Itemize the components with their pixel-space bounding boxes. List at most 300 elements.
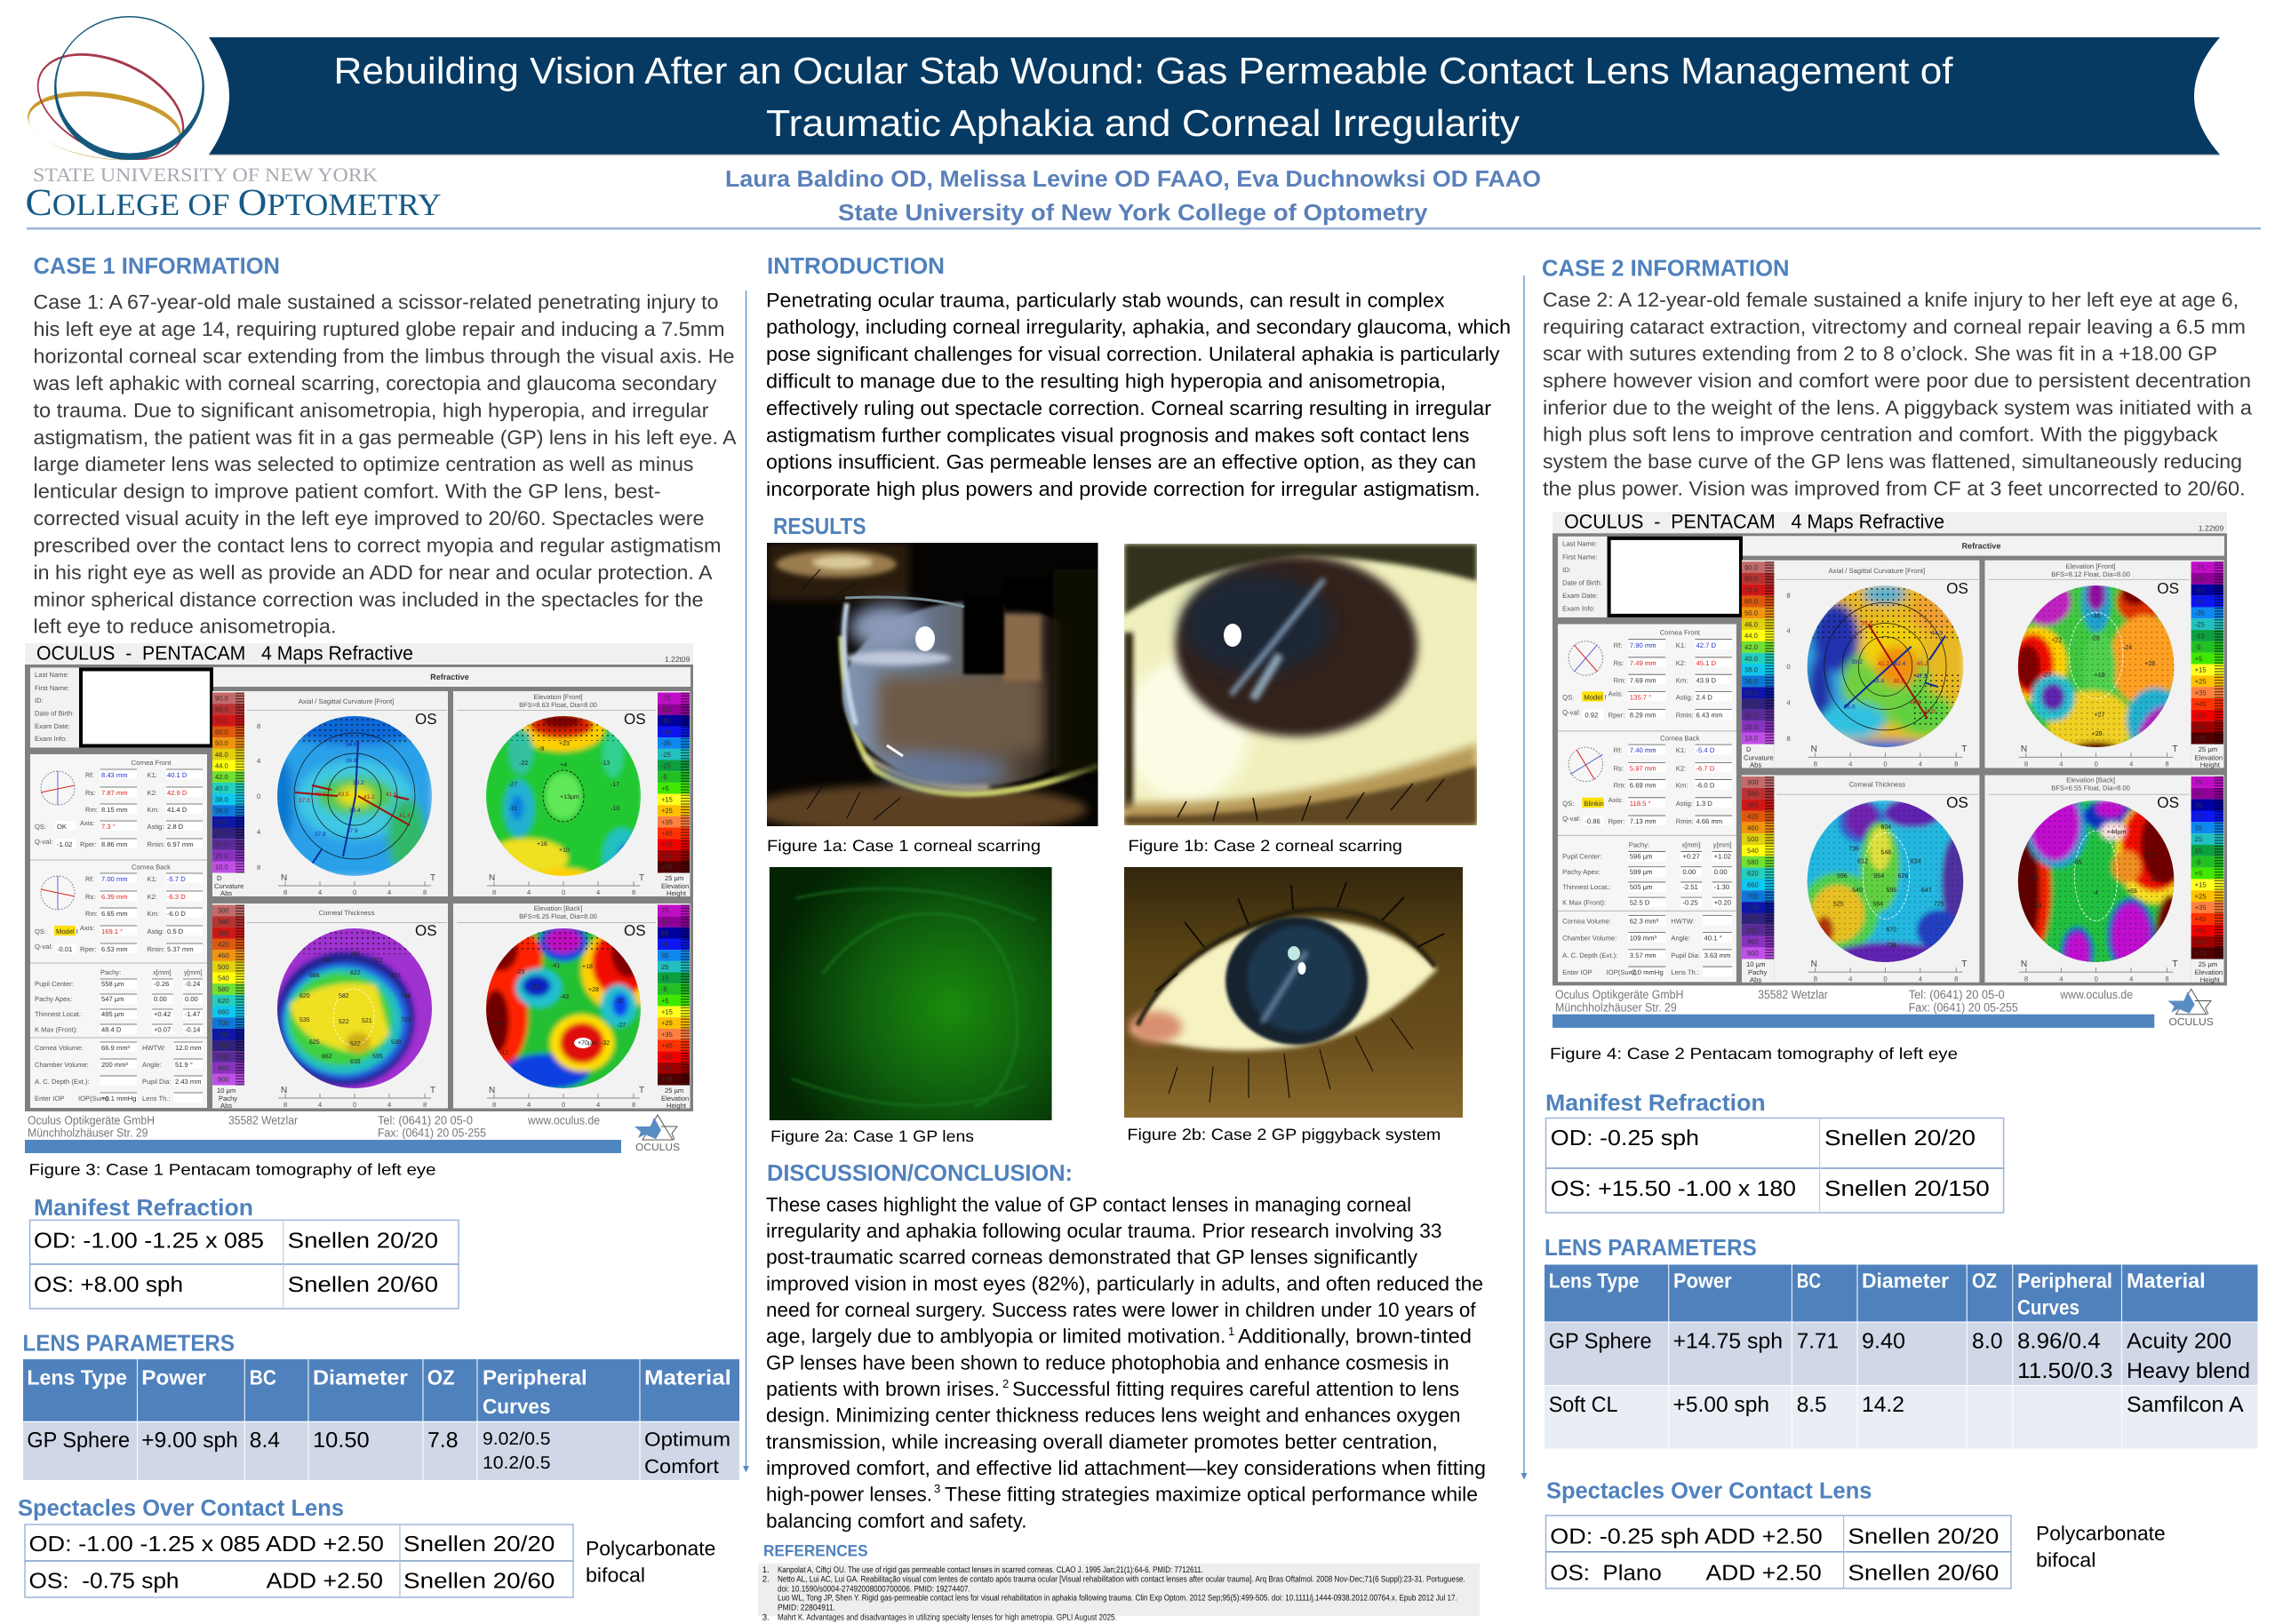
- chart: case 1 Pentacam 4 maps refractive: Rs:: [85, 893, 95, 901]
- chart: case 1 Pentacam 4 maps refractive: Km:: [148, 806, 159, 814]
- caption: figure 2b: Figure 2b: Case 2 GP piggyback system: [1127, 1126, 1441, 1143]
- map: elevation front: -24: [2123, 645, 2132, 651]
- text block: case 2 narrative: requiring cataract extraction, vitrectomy and corneal repair leaving a 6.5 mm: [1543, 315, 2246, 338]
- map: elevation back: -52: [531, 984, 540, 991]
- chart: case 1 Pentacam 4 maps refractive: N: [281, 873, 287, 883]
- table: manifest refraction: OD: -0.25 sph: [1551, 1126, 1699, 1150]
- text block: reference list: Kanpolat A, Ciftçi OU. The use of rigid gas permeable contact lenses in scarred corneas. CLAO J. 1995 Jan;21(1):64-6. PMID: 7712611.: [778, 1565, 1203, 1575]
- chart: case 1 Pentacam 4 maps refractive: 420: [218, 940, 229, 949]
- chart: case 2 Pentacam 4 maps refractive: 60.0: [1744, 598, 1758, 606]
- chart: case 1 Pentacam 4 maps refractive: -6.0 D: [167, 910, 186, 918]
- chart: case 2 Pentacam 4 maps refractive: Elevation: [2195, 968, 2223, 976]
- text block: case 1 narrative: astigmatism, the patient was fit in a gas permeable (GP) lens in his left eye. A: [34, 426, 736, 449]
- chart: case 1 Pentacam 4 maps refractive: Cornea Back: [132, 864, 171, 871]
- chart: case 2 Pentacam 4 maps refractive: +65: [2195, 938, 2207, 946]
- chart: case 2 Pentacam 4 maps refractive: 6.43 mm: [1696, 712, 1722, 720]
- chart: case 1 Pentacam 4 maps refractive: T: [430, 1086, 435, 1095]
- chart: case 2 Pentacam 4 maps refractive: 90.0: [1744, 563, 1758, 571]
- map: corneal thickness: 725: [1934, 901, 1944, 907]
- chart: case 2 Pentacam 4 maps refractive: T: [1961, 744, 1967, 754]
- chart: case 1 Pentacam 4 maps refractive: Tel: (0641) 20 05-0: [378, 1114, 473, 1126]
- text block: case 2 narrative: Case 2: A 12-year-old female sustained a knife injury to her left eye at age 6,: [1543, 289, 2239, 311]
- text block: discussion: irregularity and aphakia following ocular trauma. Prior research involving 33: [766, 1220, 1442, 1242]
- chart: case 1 Pentacam 4 maps refractive: 51.9 °: [175, 1061, 193, 1069]
- chart: case 2 Pentacam 4 maps refractive: 42.7 D: [1696, 641, 1717, 649]
- text block: discussion: 3: [934, 1482, 940, 1495]
- chart: case 1 Pentacam 4 maps refractive: -1.47: [185, 1010, 200, 1018]
- map: corneal thickness: 723: [401, 1017, 411, 1023]
- table: manifest refraction: Snellen 20/150: [1824, 1177, 1990, 1201]
- chart: case 1 Pentacam 4 maps refractive: T: [639, 1086, 644, 1095]
- text block: reference list: PMID: 22804911.: [778, 1604, 835, 1613]
- heading: spectacles over contact lens: Spectacles Over Contact Lens: [1546, 1477, 1872, 1504]
- map: elevation back: -47: [2150, 877, 2159, 883]
- chart: case 1 Pentacam 4 maps refractive: Cornea Volume:: [35, 1044, 83, 1052]
- heading: manifest refraction: Manifest Refraction: [1545, 1089, 1766, 1116]
- chart: case 1 Pentacam 4 maps refractive: Elevation [Back]: [534, 904, 582, 912]
- chart: case 2 Pentacam 4 maps refractive: 62.3 mm³: [1630, 917, 1659, 926]
- chart: case 1 Pentacam 4 maps refractive: -6.3 D: [167, 893, 186, 901]
- map: elevation back: -12: [499, 1050, 508, 1056]
- map: axial curvature: 45.2: [1917, 661, 1928, 667]
- chart: case 1 Pentacam 4 maps refractive: 70.0: [215, 717, 228, 725]
- chart: case 1 Pentacam 4 maps refractive: 60.0: [215, 728, 228, 736]
- chart: case 1 Pentacam 4 maps refractive: 460: [218, 951, 229, 959]
- chart: case 1 Pentacam 4 maps refractive: QS:: [35, 823, 46, 831]
- chart: case 1 Pentacam 4 maps refractive: 860: [218, 1064, 229, 1072]
- chart: case 1 Pentacam 4 maps refractive: HWTW:: [142, 1044, 165, 1052]
- chart: case 2 Pentacam 4 maps refractive: -5: [2195, 858, 2200, 866]
- chart: case 1 Pentacam 4 maps refractive: 8: [423, 888, 427, 896]
- text block: discussion: These cases highlight the value of GP contact lenses in managing corneal: [766, 1193, 1411, 1215]
- chart: case 2 Pentacam 4 maps refractive: 7.90 mm: [1630, 641, 1656, 649]
- table: spectacles: ADD +2.50: [267, 1570, 383, 1594]
- chart: case 2 Pentacam 4 maps refractive: 420: [1747, 813, 1759, 821]
- chart: case 1 Pentacam 4 maps refractive: -5: [661, 773, 667, 781]
- chart: case 2 Pentacam 4 maps refractive: 8: [2165, 975, 2169, 983]
- table: spectacles: OS: -0.75 sph: [28, 1570, 179, 1594]
- table: manifest refraction: OS: +15.50 -1.00 x 180: [1551, 1177, 1796, 1201]
- map: axial curvature: 36.6: [1844, 705, 1856, 711]
- chart: case 2 Pentacam 4 maps refractive: +55: [2195, 927, 2207, 935]
- map: elevation front: -22: [519, 760, 528, 767]
- chart: case 1 Pentacam 4 maps refractive: 300: [218, 906, 229, 915]
- map: elevation front: -9: [539, 746, 544, 752]
- chart: case 1 Pentacam 4 maps refractive: Münchholzhäuser Str. 29: [28, 1126, 148, 1140]
- text block: introduction: incorporate high plus powers and provide correction for irregular astigmatism.: [766, 478, 1481, 500]
- table: lens parameters: OZ: [1972, 1269, 1997, 1292]
- map: corneal thickness: 625: [309, 1039, 320, 1046]
- map: corneal thickness: 530: [391, 1039, 402, 1046]
- chart: case 1 Pentacam 4 maps refractive: 8: [492, 1101, 496, 1109]
- map: elevation front: -28: [2091, 636, 2100, 642]
- heading: case 2 information: CASE 2 INFORMATION: [1542, 255, 1790, 282]
- text block: discussion: [766, 1193, 1486, 1532]
- chart: case 1 Pentacam 4 maps refractive: Enter IOP: [35, 1095, 64, 1103]
- chart: case 1 Pentacam 4 maps refractive: Exam Info:: [35, 735, 67, 743]
- map: corneal thickness: 626: [1898, 873, 1908, 880]
- chart: case 2 Pentacam 4 maps refractive: +5: [2195, 870, 2202, 878]
- chart: case 1 Pentacam 4 maps refractive: K1:: [148, 771, 157, 779]
- chart: case 2 Pentacam 4 maps refractive: 900: [1747, 949, 1759, 957]
- chart: case 1 Pentacam 4 maps refractive: 340: [218, 918, 229, 926]
- map: axial curvature: 44.3: [1931, 631, 1943, 637]
- chart: case 2 Pentacam 4 maps refractive: +45: [2195, 915, 2207, 923]
- chart: case 1 Pentacam 4 maps refractive: Rf:: [85, 875, 94, 883]
- chart: case 1 Pentacam 4 maps refractive: T: [639, 873, 644, 883]
- chart: case 1 Pentacam 4 maps refractive: +15: [661, 1007, 673, 1016]
- table: lens parameters: Comfort: [644, 1455, 719, 1477]
- text block: discussion: Successful fitting requires careful attention to lens: [1012, 1378, 1459, 1400]
- chart: case 1 Pentacam 4 maps refractive: OCULUS: [635, 1142, 680, 1153]
- chart: case 2 Pentacam 4 maps refractive: Pachy Apex:: [1562, 868, 1600, 876]
- map: elevation front: +4: [560, 762, 567, 768]
- chart: case 1 Pentacam 4 maps refractive: -55: [661, 717, 671, 725]
- text block: introduction: pose significant challenges for visual correction. Unilateral aphakia is particularly: [766, 343, 1500, 365]
- chart: case 2 Pentacam 4 maps refractive: OCULUS - PENTACAM 4 Maps Refractive: [1564, 510, 1944, 533]
- chart: case 1 Pentacam 4 maps refractive: 36.0: [215, 807, 228, 815]
- chart: case 1 Pentacam 4 maps refractive: 7.00 mm: [101, 875, 128, 883]
- chart: case 1 Pentacam 4 maps refractive: 2.43 mm: [175, 1078, 202, 1086]
- map: elevation back: +55: [2127, 888, 2137, 895]
- chart: case 2 Pentacam 4 maps refractive: +1.02: [1714, 853, 1731, 861]
- chart: case 2 Pentacam 4 maps refractive: Height: [2200, 975, 2221, 983]
- chart: case 1 Pentacam 4 maps refractive: 4: [318, 1101, 322, 1109]
- panel: case 2 information: [1542, 255, 2253, 499]
- panel: discussion and conclusion: [766, 1159, 1486, 1532]
- chart: case 2 Pentacam 4 maps refractive: Rs:: [1614, 764, 1624, 772]
- chart: case 1 Pentacam 4 maps refractive: 4: [596, 888, 600, 896]
- map: elevation back: +44µm: [2107, 829, 2127, 835]
- chart: case 2 Pentacam 4 maps refractive: 25 µm: [2199, 960, 2217, 968]
- panel: case 2 lens parameters: [1545, 1234, 2257, 1448]
- chart: case 2 Pentacam 4 maps refractive: +15: [2195, 880, 2207, 889]
- text block: case 1 narrative: [32, 291, 736, 638]
- chart: case 1 Pentacam 4 maps refractive: +35: [661, 818, 673, 826]
- chart: case 1 Pentacam 4 maps refractive: 8: [492, 888, 496, 896]
- chart: case 2 Pentacam 4 maps refractive: K2:: [1676, 659, 1686, 667]
- chart: case 2 Pentacam 4 maps refractive: QS:: [1562, 693, 1574, 702]
- caption: figure 1a: Figure 1a: Case 1 corneal scarring: [767, 837, 1041, 855]
- map: corneal thickness: 647: [1921, 888, 1932, 894]
- table: lens parameters: 8.0: [1972, 1330, 2003, 1354]
- text block: discussion: improved vision in most eyes (82%), particularly in adults, and often reduced the: [766, 1272, 1483, 1294]
- chart: case 2 Pentacam 4 maps refractive: Rs:: [1614, 659, 1624, 667]
- authors and affiliation: [725, 165, 1541, 226]
- chart: case 2 Pentacam 4 maps refractive: 860: [1747, 938, 1759, 946]
- chart: case 1 Pentacam 4 maps refractive: 500: [218, 963, 229, 971]
- chart: case 2 Pentacam 4 maps refractive: Chamber Volume:: [1562, 935, 1616, 943]
- chart: case 2 Pentacam 4 maps refractive: Cornea Front: [1660, 629, 1701, 637]
- map: corneal thickness: 522: [350, 1041, 361, 1047]
- chart: case 1 Pentacam 4 maps refractive: -0.24: [185, 980, 200, 988]
- chart: case 1 Pentacam 4 maps refractive: 2.8 D: [167, 823, 184, 831]
- chart: case 1 Pentacam 4 maps refractive: OS: [624, 711, 646, 728]
- table: spectacles: Snellen 20/60: [1848, 1562, 1999, 1586]
- chart: case 1 Pentacam 4 maps refractive: 80.0: [215, 705, 228, 713]
- chart: case 1 Pentacam 4 maps refractive: 66.9 mm³: [101, 1044, 131, 1052]
- table: lens parameters: 7.8: [427, 1429, 459, 1453]
- text block: discussion: GP lenses have been shown to reduce photophobia and enhance cosmesis in: [766, 1351, 1449, 1373]
- chart: case 1 Pentacam 4 maps refractive: 495 µm: [101, 1010, 124, 1018]
- map: corneal thickness: 672: [1886, 927, 1896, 934]
- chart: case 2 Pentacam 4 maps refractive: Refractive: [1961, 541, 2000, 551]
- text block: case 2 narrative: system the base curve of the GP lens was flattened, simultaneously reducing: [1543, 450, 2242, 473]
- chart: case 1 Pentacam 4 maps refractive: 30.0: [215, 840, 228, 848]
- chart: case 1 Pentacam 4 maps refractive: 740: [218, 1031, 229, 1039]
- map: elevation back: -23: [515, 969, 524, 975]
- map: axial curvature: [1808, 585, 1964, 748]
- map: axial curvature: 38.2: [353, 780, 364, 786]
- chart: case 1 Pentacam 4 maps refractive: +55: [661, 840, 673, 848]
- chart: case 1 Pentacam 4 maps refractive: +75: [661, 864, 673, 871]
- logo: State University of New York College of Optometry: [20, 16, 441, 224]
- chart: case 1 Pentacam 4 maps refractive: 0.00: [154, 995, 167, 1003]
- chart: case 1 Pentacam 4 maps refractive: -5.7 D: [167, 875, 186, 883]
- table: lens parameters: Material: [2127, 1269, 2206, 1292]
- chart: case 2 Pentacam 4 maps refractive: 4: [2129, 760, 2133, 768]
- chart: case 1 Pentacam 4 maps refractive: Height: [667, 1102, 687, 1110]
- chart: case 1 Pentacam 4 maps refractive: +25: [661, 807, 673, 815]
- chart: case 1 Pentacam 4 maps refractive: Axial / Sagittal Curvature [Front]: [299, 697, 394, 705]
- table: lens parameters: GP Sphere: [1549, 1330, 1652, 1354]
- chart: case 2 Pentacam 4 maps refractive: -1.30: [1714, 883, 1729, 891]
- chart: case 1 Pentacam 4 maps refractive: Elevation: [661, 1095, 689, 1103]
- chart: case 1 Pentacam 4 maps refractive: 7.3 °: [101, 823, 116, 831]
- chart: case 1 Pentacam 4 maps refractive: +75: [661, 1075, 673, 1084]
- chart: case 1 Pentacam 4 maps refractive: T: [430, 873, 435, 883]
- table: lens parameters: Peripheral: [483, 1366, 587, 1389]
- panel: introduction: [766, 252, 1511, 500]
- chart: case 2 Pentacam 4 maps refractive: Axial / Sagittal Curvature [Front]: [1829, 567, 1925, 575]
- chart: case 2 Pentacam 4 maps refractive: Pupil Center:: [1562, 853, 1601, 861]
- chart: case 1 Pentacam 4 maps refractive: Axis:: [80, 924, 94, 932]
- chart: case 2 Pentacam 4 maps refractive: 75: [2195, 778, 2202, 786]
- chart: case 1 Pentacam 4 maps refractive: 900: [218, 1075, 229, 1084]
- text block: case 1 narrative: horizontal corneal scar extending from the limbus through the visual axis. He: [34, 345, 734, 368]
- chart: case 1 Pentacam 4 maps refractive: Rm:: [85, 910, 98, 918]
- chart: case 2 Pentacam 4 maps refractive: +55: [2195, 712, 2207, 720]
- chart: case 2 Pentacam 4 maps refractive: -25: [2195, 620, 2205, 628]
- chart: case 2 Pentacam 4 maps refractive: 4: [1786, 627, 1791, 635]
- chart: case 1 Pentacam 4 maps refractive: -0.14: [185, 1025, 200, 1034]
- chart: case 1 Pentacam 4 maps refractive: -35: [661, 739, 671, 747]
- map: elevation front: +23: [559, 741, 570, 747]
- chart: case 2 Pentacam 4 maps refractive: Height: [2200, 760, 2221, 768]
- chart: case 1 Pentacam 4 maps refractive: 35: [661, 951, 668, 959]
- text block: discussion: high-power lenses.: [766, 1484, 932, 1506]
- chart: case 1 Pentacam 4 maps refractive: OS: [415, 922, 437, 939]
- chart: case 2 Pentacam 4 maps refractive: K1:: [1676, 641, 1686, 649]
- table: lens parameters: 11.50/0.3: [2017, 1359, 2112, 1383]
- table: spectacles: [25, 1524, 573, 1597]
- chart: case 1 Pentacam 4 maps refractive: OK: [57, 823, 67, 831]
- chart: case 2 Pentacam 4 maps refractive: 8: [1786, 735, 1791, 743]
- chart: case 2 Pentacam 4 maps refractive: -55: [2195, 586, 2205, 594]
- map: corneal thickness: 662: [322, 1054, 332, 1060]
- chart: case 2 Pentacam 4 maps refractive: +25: [2195, 677, 2207, 686]
- map: elevation back: [486, 928, 641, 1088]
- chart: case 1 Pentacam 4 maps refractive: Model I: [56, 927, 78, 935]
- note: polycarbonate bifocal: Polycarbonate: [586, 1537, 715, 1560]
- chart: case 2 Pentacam 4 maps refractive: 4: [1786, 698, 1791, 707]
- chart: case 2 Pentacam 4 maps refractive: +25: [2195, 892, 2207, 900]
- chart: case 2 Pentacam 4 maps refractive: 32.0: [1744, 700, 1758, 708]
- chart: case 2 Pentacam 4 maps refractive: 0.00: [1682, 868, 1696, 876]
- chart: case 2 Pentacam 4 maps refractive: 4: [2059, 975, 2063, 983]
- chart: case 1 Pentacam 4 maps refractive: +5: [661, 997, 669, 1005]
- map: elevation back: -32: [615, 999, 624, 1005]
- table: lens parameters: Diameter: [1862, 1269, 1949, 1292]
- text block: discussion: transmission, while increasing overall diameter promotes better centration,: [766, 1430, 1438, 1453]
- chart: case 2 Pentacam 4 maps refractive: OCULUS: [2168, 1017, 2214, 1028]
- chart: case 2 Pentacam 4 maps refractive: IOP(Sum):: [1607, 968, 1639, 976]
- map: corneal thickness: 525: [1833, 901, 1844, 907]
- chart: case 2 Pentacam 4 maps refractive: 4: [2059, 760, 2063, 768]
- table: lens parameters: BC: [1797, 1269, 1821, 1292]
- table: lens parameters: GP Sphere: [27, 1429, 130, 1453]
- text block: reference list: 2.: [762, 1574, 770, 1584]
- chart: case 2 Pentacam 4 maps refractive: Date of Birth:: [1562, 578, 1602, 587]
- table: spectacles: Snellen 20/60: [403, 1570, 555, 1594]
- text block: discussion: post-traumatic scarred corneas demonstrated that GP lenses significantly: [766, 1246, 1418, 1269]
- chart: case 2 Pentacam 4 maps refractive: -15: [2195, 632, 2205, 640]
- chart: case 2 Pentacam 4 maps refractive: Km:: [1676, 782, 1688, 790]
- table: spectacles: OS: Plano: [1550, 1562, 1662, 1586]
- chart: case 1 Pentacam 4 maps refractive: -0.01: [57, 945, 72, 953]
- chart: case 2 Pentacam 4 maps refractive: 38.0: [1744, 666, 1758, 674]
- chart: case 2 Pentacam 4 maps refractive: 7.13 mm: [1630, 817, 1656, 825]
- chart: case 2 Pentacam 4 maps refractive: 380: [1747, 801, 1759, 809]
- map: corneal thickness: 604: [1880, 824, 1891, 831]
- chart: case 2 Pentacam 4 maps refractive: First Name:: [1562, 553, 1598, 561]
- text block: introduction: astigmatism further complicates visual prognosis and makes soft contact lens: [766, 424, 1470, 446]
- map: elevation front: +28: [2144, 661, 2155, 667]
- chart: case 1 Pentacam 4 maps refractive: Rm:: [85, 806, 98, 814]
- map: elevation back: -27: [617, 1023, 626, 1029]
- table: lens parameters: 7.71: [1797, 1330, 1839, 1354]
- text block: discussion: Additionally, brown-tinted: [1238, 1325, 1472, 1348]
- chart: case 2 Pentacam 4 maps refractive: Rm:: [1614, 782, 1626, 790]
- panel: case 1 manifest refraction: [30, 1194, 459, 1309]
- chart: case 2 Pentacam 4 maps refractive: Tel: (0641) 20 05-0: [1909, 988, 2005, 1001]
- map: axial curvature: 48.0: [1924, 709, 1936, 715]
- table: lens parameters: Optimum: [644, 1429, 730, 1451]
- chart: case 2 Pentacam 4 maps refractive: 8.29 mm: [1630, 712, 1656, 720]
- chart: case 2 Pentacam 4 maps refractive: 46.0: [1744, 620, 1758, 628]
- chart: case 2 Pentacam 4 maps refractive: 300: [1747, 778, 1759, 786]
- table: manifest refraction: Snellen 20/60: [288, 1273, 438, 1297]
- chart: case 1 Pentacam 4 maps refractive: OS: [624, 922, 646, 939]
- chart: case 1 Pentacam 4 maps refractive: +55: [661, 1053, 673, 1061]
- table: spectacles: Snellen 20/20: [403, 1532, 555, 1556]
- text block: reference list: Mahrt K. Advantages and disadvantages in utilizing specialty lenses for high ametropia. GPLI August 2025.: [778, 1613, 1117, 1623]
- chart: case 2 Pentacam 4 maps refractive: 4: [1848, 975, 1852, 983]
- chart: case 2 Pentacam 4 maps refractive: Cornea Back: [1660, 734, 1700, 743]
- map: corneal thickness: 521: [362, 1018, 372, 1024]
- text block: introduction: [766, 289, 1511, 500]
- chart: case 2 Pentacam 4 maps refractive: 40.1 °: [1704, 935, 1722, 943]
- chart: case 1 Pentacam 4 maps refractive: Refractive: [430, 673, 469, 681]
- chart: case 1 Pentacam 4 maps refractive: 25 µm: [665, 1087, 683, 1095]
- chart: case 1 Pentacam 4 maps refractive: 8: [632, 888, 635, 896]
- chart: case 1 Pentacam 4 maps refractive: Abs: [220, 1102, 232, 1110]
- chart: case 1 Pentacam 4 maps refractive: 4: [387, 1101, 391, 1109]
- map: corneal thickness: 595: [1886, 888, 1896, 894]
- heading: spectacles over contact lens: Spectacles Over Contact Lens: [18, 1494, 344, 1521]
- chart: case 1 Pentacam 4 maps refractive: 55: [661, 929, 668, 937]
- chart: case 2 Pentacam 4 maps refractive: 10.0: [1744, 734, 1758, 743]
- chart: case 1 Pentacam 4 maps refractive: 34.0: [215, 818, 228, 826]
- map: axial curvature: 46.8: [1894, 678, 1905, 684]
- chart: case 2 Pentacam 4 maps refractive: 43.9 D: [1696, 676, 1717, 684]
- map: corneal thickness: 612: [1857, 859, 1868, 865]
- photo: figure 2a case 1 GP lens: [770, 867, 1052, 1120]
- chart: case 2 Pentacam 4 maps refractive: 7.49 mm: [1630, 659, 1656, 667]
- chart: case 1 Pentacam 4 maps refractive: Pupil Center:: [35, 980, 74, 988]
- chart: case 1 Pentacam 4 maps refractive: 8: [257, 864, 260, 872]
- map: axial curvature: 39.8: [1861, 620, 1872, 627]
- chart: case 1 Pentacam 4 maps refractive: 25 µm: [665, 874, 683, 882]
- map: corneal thickness: 582: [339, 993, 349, 999]
- chart: case 1 Pentacam 4 maps refractive: 8: [283, 888, 287, 896]
- map: elevation back: +63: [2028, 875, 2039, 881]
- chart: case 2 Pentacam 4 maps refractive: +35: [2195, 904, 2207, 912]
- chart: case 2 Pentacam 4 maps refractive: -75: [2195, 563, 2205, 571]
- chart: case 2 Pentacam 4 maps refractive: Rmin:: [1676, 712, 1694, 720]
- chart: case 1 Pentacam 4 maps refractive: 0.5 D: [167, 927, 184, 935]
- chart: case 1 Pentacam 4 maps refractive: 558 µm: [101, 980, 124, 988]
- map: elevation front: -17: [611, 782, 619, 788]
- chart: case 1 Pentacam 4 maps refractive: Cornea Front: [132, 759, 172, 767]
- chart: case 1 Pentacam 4 maps refractive: Exam Date:: [35, 722, 70, 730]
- table: spectacles: ADD +2.50: [1706, 1562, 1822, 1586]
- table: spectacles: [1546, 1516, 2011, 1588]
- text block: discussion: These fitting strategies maximize optical performance while: [945, 1484, 1478, 1506]
- chart: case 2 Pentacam 4 maps refractive: -2.0 mmHg: [1630, 968, 1664, 976]
- map: corneal thickness: 522: [339, 1019, 349, 1025]
- map: elevation back: +18: [582, 964, 593, 970]
- note: polycarbonate bifocal: [2036, 1522, 2166, 1571]
- text block: reference list: doi: 10.1590/s0004-27492008000700006. PMID: 19274407.: [778, 1584, 970, 1594]
- chart: case 1 Pentacam 4 maps refractive: Thinnest Locat.:: [35, 1010, 83, 1018]
- chart: case 2 Pentacam 4 maps refractive: Blinkin: [1584, 800, 1604, 808]
- chart: case 1 Pentacam 4 maps refractive: 45: [661, 940, 668, 949]
- chart: case 1 Pentacam 4 maps refractive: 0: [562, 1101, 565, 1109]
- photo: figure 1b case 2 corneal scarring: [1124, 544, 1477, 825]
- chart: case 2 Pentacam 4 maps refractive: 0: [1883, 760, 1888, 768]
- table: lens parameters: 8.96/0.4: [2017, 1330, 2101, 1354]
- chart: case 2 Pentacam 4 maps refractive: Abs: [1750, 975, 1761, 983]
- chart: case 1 Pentacam 4 maps refractive: Rper:: [80, 945, 97, 953]
- chart: case 2 Pentacam 4 maps refractive: 500: [1747, 835, 1759, 843]
- chart: case 2 Pentacam 4 maps refractive: 109 mm³: [1630, 935, 1657, 943]
- table: lens parameters: Diameter: [313, 1366, 408, 1389]
- chart: case 1 Pentacam 4 maps refractive: 42.0: [215, 773, 228, 781]
- chart: case 2 Pentacam 4 maps refractive: 8: [2024, 760, 2028, 768]
- chart: case 1 Pentacam 4 maps refractive: 4: [527, 888, 531, 896]
- chart: case 1 Pentacam 4 maps refractive: Rmin:: [148, 945, 164, 953]
- text block: case 1 narrative: in his right eye as well as provide an ADD for near and ocular protection. A: [34, 561, 713, 584]
- chart: case 1 Pentacam 4 maps refractive: x[mm]: [153, 968, 172, 976]
- chart: case 2 Pentacam 4 maps refractive: 740: [1747, 904, 1759, 912]
- chart: case 2 Pentacam 4 maps refractive: 55: [2195, 801, 2202, 809]
- map: elevation back: 127: [2144, 853, 2155, 859]
- map: elevation front: -13: [601, 760, 610, 767]
- table: lens parameters: Lens Type: [1549, 1269, 1639, 1292]
- table: lens parameters: 10.50: [313, 1429, 370, 1453]
- chart: case 1 Pentacam 4 maps refractive: -0.26: [154, 980, 169, 988]
